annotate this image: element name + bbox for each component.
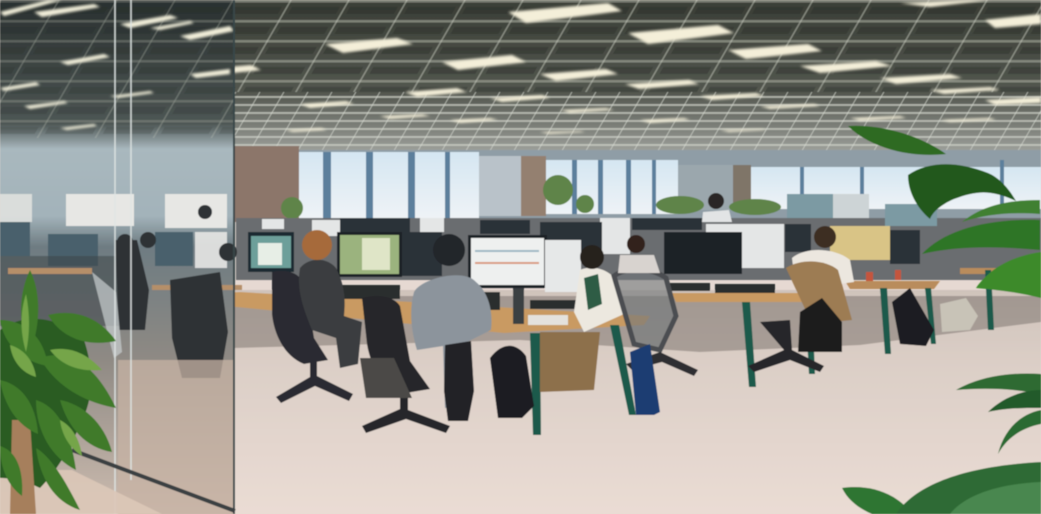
ceiling lights	[195, 0, 1041, 134]
mesh chair	[614, 269, 676, 350]
reflected back wall and panels	[0, 194, 227, 268]
back figures	[618, 193, 732, 273]
monitor: right	[664, 232, 742, 274]
bags on the floor	[360, 288, 978, 418]
back rows of desks	[235, 194, 1041, 352]
seated workers and chairs	[272, 193, 854, 433]
glass partition reflecting the room	[0, 0, 242, 514]
chair front	[362, 296, 450, 433]
background plants	[281, 175, 781, 219]
desk tops	[134, 292, 650, 333]
floor	[0, 290, 1041, 514]
main desk row	[134, 232, 1020, 435]
shadow below the desks	[235, 296, 1041, 352]
floor beside glass, lower left	[0, 470, 162, 514]
ceiling	[0, 0, 1041, 168]
reflected floor	[118, 360, 235, 514]
plant: upper right large leaves	[848, 126, 1041, 298]
chair far centre-right	[748, 320, 824, 372]
reflected ceiling lights	[0, 0, 234, 130]
trunk	[10, 420, 36, 514]
plant: lower left potted	[0, 270, 116, 514]
monitor: far left	[248, 232, 294, 272]
monitor: left	[337, 232, 402, 277]
worker left	[299, 230, 362, 368]
reflected figures	[115, 205, 237, 378]
worker right white	[786, 226, 854, 324]
back wall with windows	[235, 146, 1041, 222]
reflected monitors	[0, 222, 193, 266]
chair left	[272, 271, 353, 403]
far-right table items	[866, 270, 901, 281]
desk legs	[530, 270, 994, 435]
glass frame lines	[115, 0, 131, 514]
monitor: centre	[468, 235, 547, 324]
foliage shadow	[0, 319, 91, 488]
reflected room clutter band	[0, 256, 120, 326]
clutter on desks	[340, 283, 775, 310]
plant: lower right leaves	[842, 374, 1041, 514]
worker centre with olive coat	[540, 245, 624, 392]
worker grey jacket	[411, 234, 492, 421]
